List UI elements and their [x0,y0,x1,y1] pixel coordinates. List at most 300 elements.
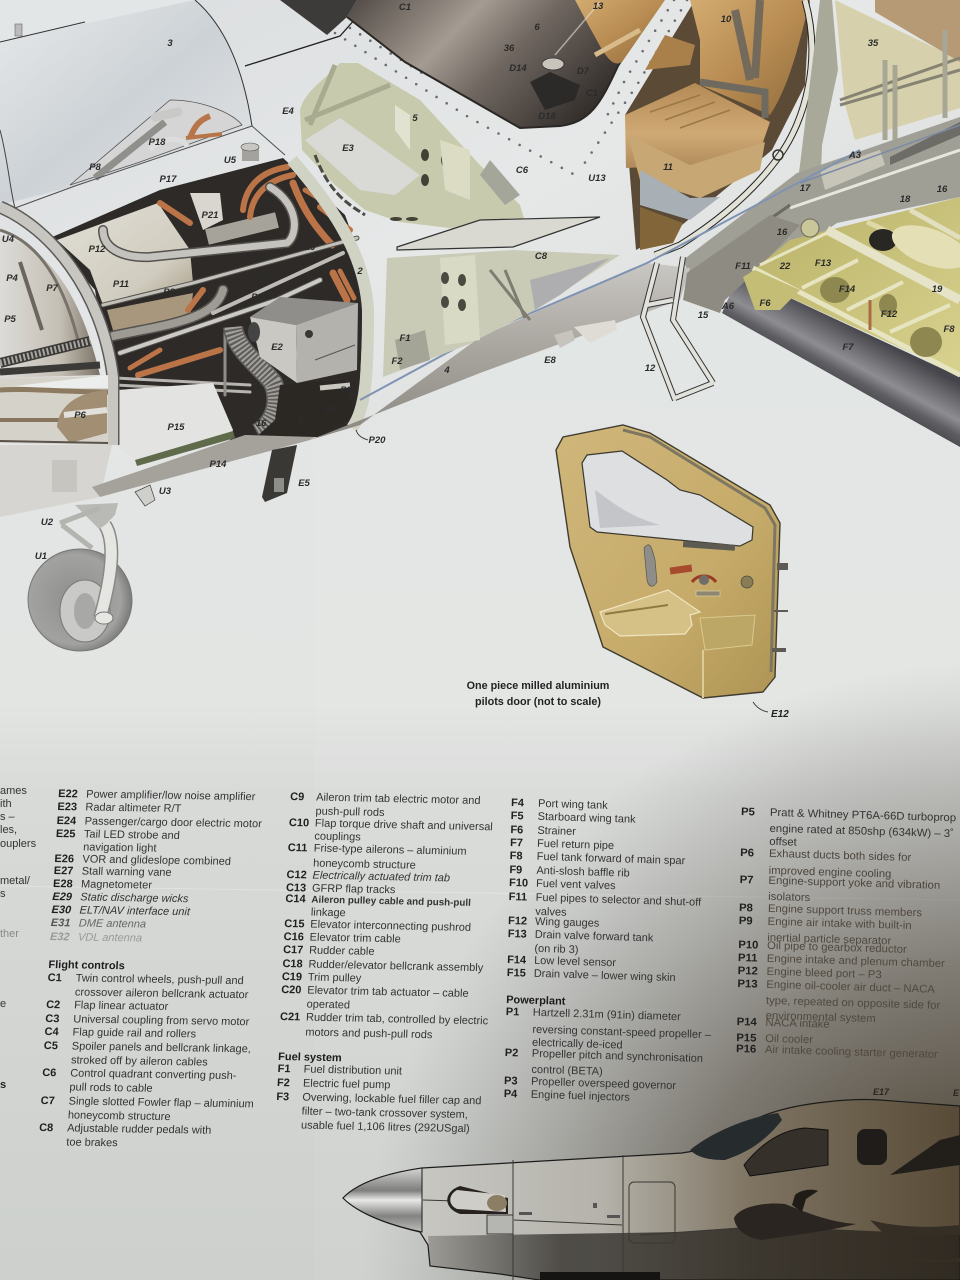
oil access opening with pipes [70,100,242,185]
legend column 3: fuel system and powerplant: Drain valve forward tank [535,929,654,944]
boarding ladder 12 [643,257,713,400]
brown bulkhead [640,207,683,250]
legend column 4: powerplant continued: Engine support truss members [768,903,923,919]
part number callouts: C6 [516,165,529,176]
part number callouts: 5 [412,113,418,124]
part number callouts: P6 [74,410,87,421]
legend column 4: powerplant continued: Engine oil-cooler air duct – NACA [766,979,936,996]
legend column 3: fuel system and powerplant: F14 [507,954,527,967]
legend column 2: flight controls and fuel system: Trim pulley [308,972,362,985]
legend column 1: electrics and flight controls: crossover aileron bellcrank actuator [75,986,249,1001]
legend column 3: fuel system and powerplant: P1 [506,1006,519,1018]
legend column 1: electrics and flight controls: pull rods to cable [69,1081,153,1095]
part number callouts: 36 [504,43,515,54]
part number callouts: P7 [46,283,59,294]
part number callouts: C8 [535,251,548,262]
wing root fairing [683,117,960,300]
legend column fragment clipped at left edge: s – [0,811,16,823]
legend column 4: powerplant continued: P11 [738,952,758,965]
legend column 4: powerplant continued: P9 [739,915,753,927]
legend column 1: electrics and flight controls: Twin control wheels, push-pull and [75,972,244,987]
legend column 3: fuel system and powerplant: F4 [511,797,525,809]
small aircraft callouts: E [953,1088,960,1098]
part number callouts: 15 [698,310,709,321]
small side-view aircraft [343,1100,960,1280]
part number callouts: P15 [168,422,185,433]
wing root structure dark [683,215,800,313]
heading: powerplant: Powerplant [506,994,566,1008]
rivet strips [335,0,687,175]
part number callouts: C1 [586,88,598,99]
legend column 4: powerplant continued: P12 [738,965,758,978]
engine strut [792,1190,818,1212]
part number callouts: 19 [932,284,943,295]
legend column fragment clipped at left edge: ouplers [0,838,37,850]
instrument shelf [397,217,600,250]
part number callouts: P22 [247,253,264,264]
part number callouts: P19 [299,242,316,253]
legend column 2: flight controls and fuel system: Rudder/elevator bellcrank assembly [308,959,484,974]
part number callouts: U5 [224,155,237,166]
legend column 1: electrics and flight controls: Flap guide rail and rollers [72,1026,197,1040]
seat cushion 11 [625,83,770,220]
E5 antenna blade [262,445,297,502]
nose landing gear [21,503,139,658]
legend column 4: powerplant continued: P13 [737,978,758,991]
legend column 3: fuel system and powerplant: Strainer [537,825,576,838]
legend column 4: powerplant continued: Air intake cooling starter generator [765,1044,938,1061]
part number callouts: P14 [210,459,227,470]
U5 filler cap [241,143,259,161]
door frame curve [655,0,812,255]
legend column 2: flight controls and fuel system: Frise-type ailerons – aluminium [314,843,467,858]
legend column 2: flight controls and fuel system: Electric fuel pump [303,1078,391,1091]
lower cowl dark base [540,1272,660,1280]
legend column 2: flight controls and fuel system: linkage [311,907,346,919]
wing fuel tank ribs [743,197,960,375]
E12 callout: E12 [771,709,789,720]
pilots door illustration [556,425,788,698]
part number callouts: U4 [2,234,15,245]
legend column 2: flight controls and fuel system: usable fuel 1,106 litres (292USgal) [301,1120,470,1135]
part number callouts: P16 [249,272,266,283]
legend column 1: electrics and flight controls: C3 [45,1013,60,1025]
legend column 1: electrics and flight controls: Radar altimeter R/T [85,801,182,815]
legend column 3: fuel system and powerplant: F12 [508,915,527,928]
part number callouts: P12 [89,244,106,255]
legend column 1: electrics and flight controls: Passenger/cargo door electric motor [84,815,262,830]
flap fairings [870,1220,960,1262]
legend column 1: electrics and flight controls: DME antenna [78,917,146,931]
P5 turboprop engine [0,230,100,378]
P20 leader [356,430,368,440]
legend column 1: electrics and flight controls: C2 [46,999,61,1011]
part number callouts: 17 [800,183,811,194]
legend column 2: flight controls and fuel system: push-pull rods [315,806,385,819]
legend column 3: fuel system and powerplant: Low level sensor [534,955,617,969]
legend column 3: fuel system and powerplant: F11 [509,891,527,904]
part number callouts: D7 [577,66,590,77]
part number callouts: C1 [399,2,411,13]
lower cowl and intake [0,435,315,517]
P6 exhaust duct [0,375,108,445]
legend column 4: powerplant continued: P6 [740,847,754,859]
part number callouts: F2 [391,356,403,367]
legend column 2: flight controls and fuel system: motors and push-pull rods [305,1027,433,1041]
legend column 3: fuel system and powerplant: Starboard wing tank [538,811,636,826]
legend column 3: fuel system and powerplant: F6 [510,824,523,836]
part number callouts: P8 [89,162,102,173]
legend column 2: flight controls and fuel system: honeycomb structure [313,858,416,872]
part number callouts: P8 [340,385,353,396]
legend column 2: flight controls and fuel system: Rudder cable [309,945,375,958]
legend column 2: flight controls and fuel system: C15 [284,918,305,930]
side window [744,1128,828,1176]
legend column 3: fuel system and powerplant: F8 [510,850,523,862]
control column C1 [530,58,580,110]
part number callouts: F7 [842,342,854,353]
legend column 2: flight controls and fuel system: F1 [277,1063,291,1075]
part number callouts: U3 [159,486,172,497]
legend column 2: flight controls and fuel system: Rudder trim tab, controlled by electric [306,1012,489,1027]
legend column 3: fuel system and powerplant: Wing gauges [535,916,600,930]
legend column 1: electrics and flight controls: E26 [54,853,74,865]
legend column 1: electrics and flight controls: Static discharge wicks [80,891,189,905]
legend column 1: electrics and flight controls [38,788,272,1151]
legend column 4: powerplant continued: type, repeated on opposite side for [766,995,941,1012]
legend column 3: fuel system and powerplant: control (BETA) [531,1064,603,1078]
legend column fragment clipped at left edge: e [0,998,6,1010]
grey oil and air tubes [103,187,357,395]
legend column 1: electrics and flight controls: Spoiler panels and bellcrank linkage, [71,1040,251,1055]
legend column 3: fuel system and powerplant: Fuel tank forward of main spar [537,851,686,867]
legend column fragment clipped at left edge: ith [0,798,12,810]
legend column 4: powerplant continued: P16 [736,1043,756,1056]
legend column 3: fuel system and powerplant: F7 [510,837,523,849]
door caption: One piece milled aluminium [467,680,609,692]
part number callouts: 6 [534,22,540,33]
door frame edge [623,430,775,672]
legend column 4: powerplant continued [736,806,956,1061]
legend column 4: powerplant continued: inertial particle separator [767,932,892,947]
lighting shadow across paper [300,650,960,1280]
legend column 4: powerplant continued: P5 [741,806,755,818]
small aircraft callouts: E17 [873,1087,890,1097]
legend column 1: electrics and flight controls: stroked off by aileron cables [71,1054,208,1069]
part number callouts: P8 [163,287,176,298]
U3 gear bracket [135,485,155,506]
legend column 4: powerplant continued: P15 [736,1032,757,1045]
part number callouts: P4 [6,273,19,284]
part number callouts: 35 [868,38,879,49]
part number callouts: P8 [251,292,264,303]
cutaway aircraft illustration [0,0,960,658]
part number callouts: 16 [777,227,788,238]
legend column 1: electrics and flight controls: Magnetometer [81,878,153,892]
legend column 2: flight controls and fuel system: C11 [288,842,308,854]
part number callouts: P18 [149,137,166,148]
rudder pedal well and C6 linkage [480,160,520,205]
fuselage bulkhead post 17 [795,0,838,200]
aft windscreen shadow [890,1135,960,1175]
part number callouts: U2 [41,517,54,528]
legend column 1: electrics and flight controls: E28 [53,878,73,890]
firewall frame [292,160,368,428]
legend column 1: electrics and flight controls: E27 [53,865,74,877]
legend column 1: electrics and flight controls: C5 [43,1040,58,1052]
legend column 3: fuel system and powerplant: P3 [504,1075,518,1087]
cabin window [857,1129,887,1165]
panel lines [423,1155,770,1280]
legend column 3: fuel system and powerplant: Fuel pipes to selector and shut-off [536,892,702,909]
legend column 2: flight controls and fuel system: operated [306,999,350,1011]
door hinges [772,563,788,652]
legend column 2: flight controls and fuel system: C12 [286,869,307,881]
legend column 3: fuel system and powerplant: Drain valve – lower wing skin [534,968,676,984]
engine bay [50,158,365,466]
E12 callout [753,702,789,720]
legend column 3: fuel system and powerplant: F10 [509,877,528,890]
legend column 1: electrics and flight controls: Universal coupling from servo motor [73,1013,250,1028]
engine cowling panel [0,0,252,208]
part number callouts: U13 [588,173,606,184]
legend column 1: electrics and flight controls: VOR and glideslope combined [82,853,231,868]
legend column 4: powerplant continued: Engine air intake with built-in [767,916,912,932]
legend column 2: flight controls and fuel system: C19 [282,971,302,983]
legend column 4: powerplant continued: NACA intake [765,1017,830,1031]
legend column 1: electrics and flight controls: Single slotted Fowler flap – aluminium [68,1095,254,1110]
exhaust stack [447,1186,508,1214]
nose ring frame [0,207,113,445]
legend column 3: fuel system and powerplant [504,797,718,1106]
cockpit interior well [347,0,665,128]
legend column 4: powerplant continued: Engine intake and plenum chamber [767,953,945,970]
legend column 1: electrics and flight controls: E31 [50,917,71,929]
legend column 4: powerplant continued: P10 [738,939,759,952]
legend column 3: fuel system and powerplant: Port wing tank [538,798,608,812]
wing underside F7 [722,277,960,447]
door caption [467,680,609,708]
legend column 1: electrics and flight controls: E29 [52,891,73,903]
legend column fragment clipped at left edge: ther [0,928,19,940]
legend column fragment clipped at left edge: s [0,888,6,900]
legend column 4: powerplant continued: P14 [737,1016,758,1029]
part number callouts: 16 [937,184,948,195]
part number callouts: A6 [721,301,735,312]
legend column 2: flight controls and fuel system [275,791,499,1135]
spinner [343,1168,422,1232]
part number callouts: D14 [509,63,527,74]
part number callouts: F14 [839,284,856,295]
legend column 3: fuel system and powerplant: Engine fuel injectors [531,1089,630,1104]
legend column 2: flight controls and fuel system: C18 [282,958,303,970]
part number callouts: F13 [815,258,832,269]
legend column 1: electrics and flight controls: C4 [44,1026,60,1038]
lower pocket [700,615,755,650]
small aircraft callouts [873,1087,960,1098]
legend column 3: fuel system and powerplant: Propeller pitch and synchronisation [532,1048,703,1065]
legend column 1: electrics and flight controls: Stall warning vane [81,865,172,879]
legend column fragment clipped at left edge: les, [0,824,17,836]
legend column 1: electrics and flight controls: navigation light [83,841,157,855]
legend column 4: powerplant continued: engine rated at 850shp (634kW) – 3˚ [769,823,954,840]
legend column 4: powerplant continued: Oil cooler [765,1033,813,1046]
corrugated air duct [233,327,276,433]
pilot seat back 10 [645,0,810,118]
legend column 1: electrics and flight controls: toe brakes [66,1136,118,1149]
part number callouts: F11 [735,261,751,272]
part number callouts: D18 [538,111,556,122]
legend column 3: fuel system and powerplant: Fuel return pipe [537,838,614,852]
legend column 3: fuel system and powerplant: Propeller overspeed governor [531,1076,676,1092]
legend column 2: flight controls and fuel system: C13 [286,882,306,894]
part number callouts: E4 [282,106,295,117]
legend column 4: powerplant continued: Oil pipe to gearbox reductor [767,940,907,956]
seat 13 [575,0,665,64]
legend column 2: flight controls and fuel system: C16 [283,931,304,943]
door handle [644,545,657,586]
legend column 2: flight controls and fuel system: C14 [285,893,307,905]
lower fuselage shadow [428,1226,960,1280]
part number callouts: 22 [779,261,791,272]
legend column fragment clipped at left edge [0,785,37,1091]
legend column 3: fuel system and powerplant: P2 [505,1047,518,1059]
legend column 3: fuel system and powerplant: electrically de-iced [532,1037,623,1052]
heading: fuel system: Fuel system [278,1051,342,1064]
legend column 1: electrics and flight controls: E24 [56,815,77,827]
part number callouts: A3 [848,150,862,161]
windscreen [690,1113,782,1160]
part number callouts: F1 [399,333,411,344]
legend column 1: electrics and flight controls: Tail LED strobe and [84,828,180,842]
legend column 2: flight controls and fuel system: Aileron pulley cable and push-pull [311,895,471,909]
legend column 4: powerplant continued: Exhaust ducts both sides for [769,848,912,864]
part number callouts: P21 [202,210,218,221]
cabin interior behind seats [625,0,810,250]
legend column 1: electrics and flight controls: Flap linear actuator [74,999,169,1013]
door window [582,451,753,546]
legend column 2: flight controls and fuel system: F2 [277,1077,290,1089]
legend column 1: electrics and flight controls: Power amplifier/low noise amplifier [86,788,256,803]
legend column 1: electrics and flight controls: E25 [56,828,76,840]
legend column 2: flight controls and fuel system: Aileron trim tab electric motor and [316,792,481,807]
legend column 4: powerplant continued: Pratt & Whitney PT6A-66D turboprop [770,807,956,824]
legend column 2: flight controls and fuel system: C21 [280,1011,300,1023]
legend column 2: flight controls and fuel system: Elevator interconnecting pushrod [310,919,471,934]
armrest [600,590,700,636]
legend column 3: fuel system and powerplant: F13 [508,928,527,941]
part number callouts: P16 [250,418,267,429]
legend column 2: flight controls and fuel system: Fuel distribution unit [303,1064,402,1078]
part number callouts: 2 [356,266,363,277]
part number callouts: P11 [113,279,129,290]
copper pipes [130,167,354,375]
legend column 1: electrics and flight controls: Adjustable rudder pedals with [67,1122,212,1137]
legend column 1: electrics and flight controls: ELT/NAV interface unit [79,904,191,918]
fuselage skin [0,0,960,517]
part number callouts: E5 [298,478,311,489]
legend column 4: powerplant continued: offset [769,836,798,849]
part number callouts: P20 [369,435,386,446]
warning placard and latch [670,541,753,596]
legend column fragment clipped at left edge: metal/ [0,875,31,887]
legend column 2: flight controls and fuel system: C20 [281,984,302,996]
legend column 2: flight controls and fuel system: C9 [290,791,304,803]
legend column 3: fuel system and powerplant: Anti-slosh baffle rib [536,865,630,880]
cowl joint line [15,126,285,208]
legend column 4: powerplant continued: Engine-support yoke and vibration [768,875,940,892]
legend column 1: electrics and flight controls: E23 [57,801,77,813]
legend column 2: flight controls and fuel system: C17 [283,944,304,956]
legend column 1: electrics and flight controls: E30 [51,904,72,916]
part number callouts: U1 [35,551,47,562]
door caption: pilots door (not to scale) [475,696,601,708]
legend column 1: electrics and flight controls: E22 [58,788,78,800]
E2 electrical box [248,297,358,383]
part number callouts: E6 [324,404,337,415]
legend column fragment clipped at left edge: ames [0,785,27,797]
legend column 3: fuel system and powerplant: P4 [504,1088,518,1100]
legend column 4: powerplant continued: environmental system [766,1010,876,1025]
legend column 2: flight controls and fuel system: Electrically actuated trim tab [312,870,450,884]
legend column 3: fuel system and powerplant: F9 [509,864,522,876]
legend column 1: electrics and flight controls: VDL antenna [78,931,142,944]
part number callouts: F6 [759,298,771,309]
part number callouts: E3 [342,143,355,154]
fuselage lower belly [310,150,860,440]
legend column 4: powerplant continued: P8 [739,902,753,914]
plenum chamber P11 [57,203,193,305]
legend column 2: flight controls and fuel system: Elevator trim tab actuator – cable [307,985,469,1000]
forward equipment bay E3 [300,63,530,238]
legend column 3: fuel system and powerplant: Hartzell 2.31m (91in) diameter [533,1007,681,1023]
part number callouts: E8 [544,355,557,366]
small vents [519,1203,620,1218]
legend column 3: fuel system and powerplant: Fuel vent valves [536,878,616,892]
legend column 2: flight controls and fuel system: Flap torque drive shaft and universal [315,818,493,833]
legend column 3: fuel system and powerplant: F5 [511,810,524,822]
part number callouts: 11 [663,162,673,173]
legend column 4: powerplant continued: isolators [768,891,811,904]
legend column 1: electrics and flight controls: C8 [39,1122,54,1134]
legend column 1: electrics and flight controls: Control quadrant converting push- [70,1067,237,1082]
legend column 2: flight controls and fuel system: couplings [314,831,362,844]
legend column 2: flight controls and fuel system: GFRP flap tracks [312,883,396,896]
part number callouts: 10 [721,14,732,25]
legend column 4: powerplant continued: P7 [740,874,754,886]
legend column 1: electrics and flight controls: honeycomb structure [68,1109,171,1123]
legend column 2: flight controls and fuel system: Overwing, lockable fuel filler cap and [302,1092,482,1107]
P15 oil cooler [117,383,233,460]
baggage compartment 35 [835,0,960,140]
part number callouts: E2 [271,342,284,353]
aft equipment bay [383,250,620,377]
wing fairing [734,1204,856,1240]
part number callouts [2,1,955,562]
windscreen frame line and tube [245,0,372,66]
legend column 2: flight controls and fuel system: F3 [276,1091,289,1103]
part number callouts: P5 [4,314,17,325]
legend column 4: powerplant continued: improved engine cooling [769,865,891,880]
part number callouts: 18 [900,194,911,205]
legend column 1: electrics and flight controls: E32 [50,931,70,943]
legend column 4: powerplant continued: Engine bleed port – P3 [766,966,882,981]
part number callouts: F12 [881,309,898,320]
legend column 3: fuel system and powerplant: (on rib 3) [534,943,579,956]
legend column fragment clipped at left edge: s [0,1079,6,1091]
part number callouts: E7 [298,414,311,425]
legend column 2: flight controls and fuel system: C10 [289,817,309,829]
